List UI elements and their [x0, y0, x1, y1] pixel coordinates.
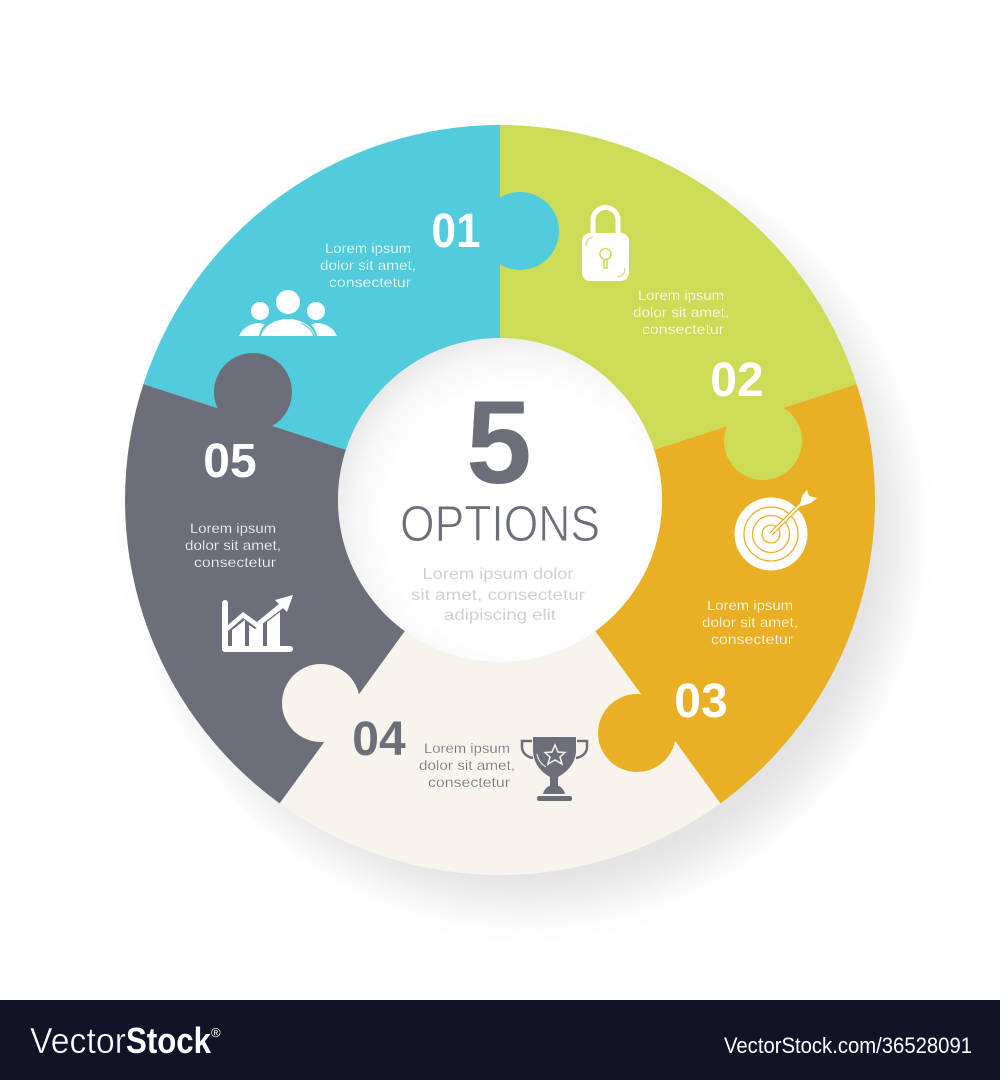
segment 01 blue: [143, 125, 500, 450]
segment 03 orange: [595, 384, 875, 803]
text block 04: Lorem ipsum: [424, 740, 510, 756]
text block 03: Lorem ipsum: [707, 597, 793, 613]
footer logo: ®: [211, 1025, 221, 1040]
tab 01: [481, 192, 559, 270]
center description: [411, 566, 586, 624]
puzzle ring chart: [125, 125, 875, 875]
text block 03: dolor sit amet,: [702, 614, 798, 630]
footer bar: [0, 1000, 1000, 1080]
tab 03: [598, 694, 676, 772]
segment 05 grey: [125, 384, 405, 803]
number 01: 01: [432, 205, 480, 258]
icon: people: [239, 290, 337, 336]
tab 02: [724, 402, 802, 480]
text block 01: [320, 240, 416, 290]
center description: sit amet, consectetur: [411, 587, 586, 604]
segment 04 cream: [280, 631, 720, 875]
text block 04: consectetur: [428, 774, 510, 790]
icon: padlock: [582, 208, 629, 281]
text block 04: [419, 740, 515, 790]
text block 01: Lorem ipsum: [325, 240, 411, 256]
tab 05: [214, 353, 292, 431]
number 03: 03: [674, 675, 728, 728]
segment 02 lime: [500, 125, 857, 450]
text block 05: dolor sit amet,: [185, 537, 281, 553]
icon: target with arrow: [734, 490, 817, 570]
footer id: VectorStock.com/36528091: [724, 1033, 972, 1058]
text block 05: Lorem ipsum: [190, 520, 276, 536]
text block 02: [633, 287, 729, 337]
number 02: 02: [710, 354, 764, 407]
icon: trophy with star: [522, 737, 587, 801]
center description: Lorem ipsum dolor: [422, 566, 574, 583]
text block 03: consectetur: [711, 631, 793, 647]
text block 03: [702, 597, 798, 647]
text block 02: consectetur: [642, 321, 724, 337]
footer logo: Stock: [126, 1020, 212, 1061]
text block 01: consectetur: [329, 274, 411, 290]
footer logo: [30, 1020, 221, 1061]
text block 04: dolor sit amet,: [419, 757, 515, 773]
center heading number: 5: [466, 377, 532, 509]
tab 04: [282, 664, 360, 742]
text block 01: dolor sit amet,: [320, 257, 416, 273]
center heading label: OPTIONS: [400, 495, 600, 552]
text block 02: Lorem ipsum: [638, 287, 724, 303]
center circle: [338, 338, 662, 662]
number 05: 05: [203, 435, 257, 488]
text block 02: dolor sit amet,: [633, 304, 729, 320]
number 04: 04: [352, 713, 406, 766]
footer logo: Vector: [30, 1020, 126, 1061]
text block 05: consectetur: [194, 554, 276, 570]
text block 05: [185, 520, 281, 570]
center description: adipiscing elit: [444, 607, 557, 624]
icon: growth chart: [222, 595, 293, 652]
